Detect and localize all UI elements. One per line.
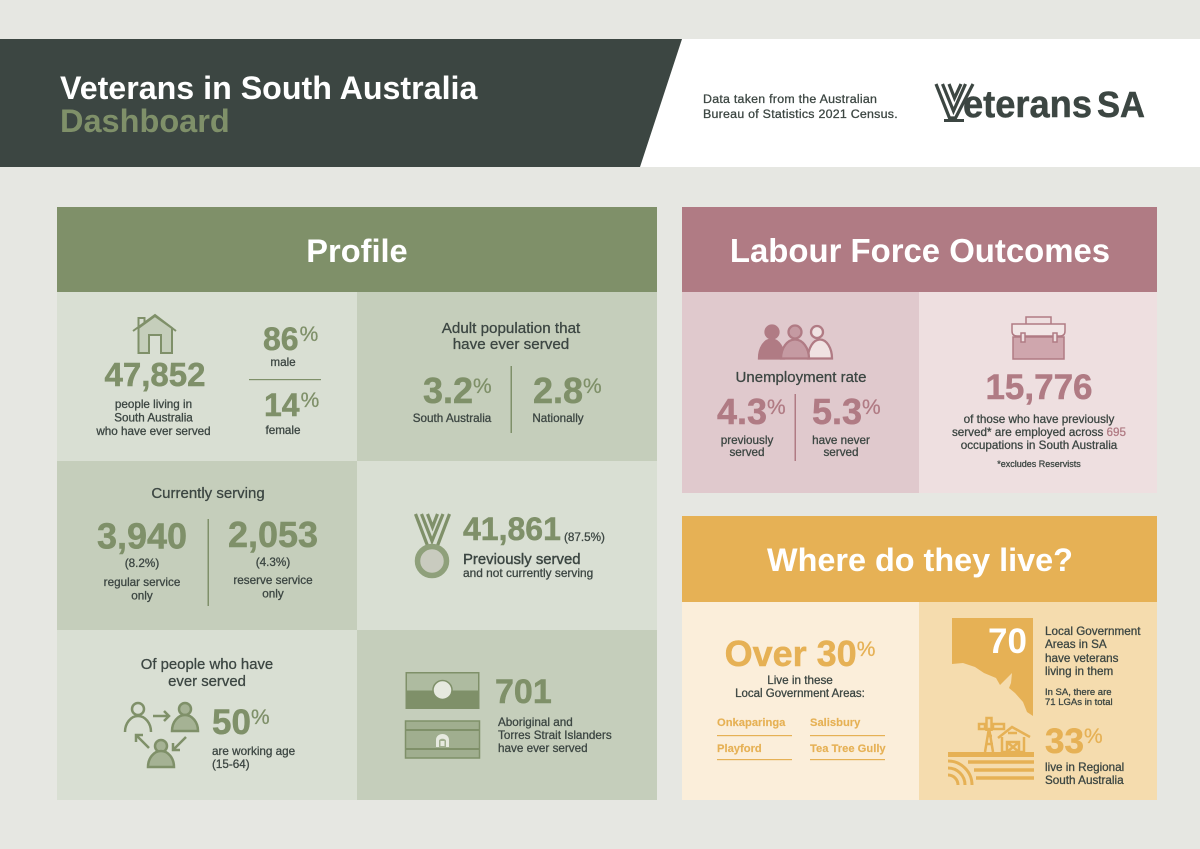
cell: currently serving: (4.3%) xyxy=(256,556,290,569)
cell: Aboriginal and Torres Strait Islanders: Torres Strait Islanders xyxy=(498,729,612,742)
icon: house xyxy=(133,315,176,353)
cell: currently serving: Currently serving xyxy=(151,485,265,502)
cell: employed across occupations: of those who have previously xyxy=(964,413,1115,426)
cell: unemployment rate: 4.3 xyxy=(717,391,767,432)
cell: people who have ever served: % xyxy=(300,323,318,346)
cell: currently serving: regular service xyxy=(104,576,180,589)
panel: Labour Force Outcomes xyxy=(682,207,1157,493)
cell: people who have ever served: female xyxy=(265,424,301,437)
data source note: Bureau of Statistics 2021 Census. xyxy=(703,107,898,121)
cell: working age: Of people who have xyxy=(141,657,273,673)
cell: previously served: and not currently serving xyxy=(463,566,593,580)
cell: LGAs and regional: Areas in SA xyxy=(1045,638,1107,651)
cell: employed across occupations: *excludes Reservists xyxy=(997,459,1081,469)
title: Veterans in South Australia xyxy=(60,70,478,106)
cell: LGAs and regional xyxy=(919,602,1157,800)
cell: LGAs and regional: Local Government xyxy=(1045,625,1141,638)
cell: currently serving: reserve service xyxy=(233,574,313,587)
cell: previously served: (87.5%) xyxy=(564,531,605,544)
cell: LGAs and regional: have veterans xyxy=(1045,652,1119,665)
logo: Veterans SA xyxy=(936,84,1145,126)
data source note: Data taken from the Australian xyxy=(703,92,877,106)
cell: unemployment rate: served xyxy=(729,446,765,459)
cell: adult population: 2.8 xyxy=(533,370,583,411)
cell: people who have ever served: 47,852 xyxy=(105,356,205,393)
cell: over 30 percent: Live in these xyxy=(767,674,833,687)
cell: currently serving: only xyxy=(262,588,284,600)
cell: over 30 percent: Over 30 xyxy=(725,633,857,674)
cell: working age: ever served xyxy=(168,674,246,690)
cell: currently serving: only xyxy=(131,590,153,602)
icon: Torres Strait Islander flag xyxy=(405,721,480,758)
cell: currently serving: 2,053 xyxy=(228,514,318,555)
cell: unemployment rate: % xyxy=(862,396,881,419)
cell: employed across occupations xyxy=(919,292,1157,493)
heading: Labour Force Outcomes xyxy=(682,207,1157,292)
data source note xyxy=(703,92,898,121)
cell: adult population: have ever served xyxy=(453,336,569,353)
cell: LGAs and regional: In SA, there are xyxy=(1045,687,1112,698)
map: South Australia xyxy=(952,618,1033,716)
cell: adult population: % xyxy=(583,375,602,398)
cell: previously served xyxy=(357,461,657,630)
cell: employed across occupations: occupations in South Australia xyxy=(961,439,1118,452)
cell: currently serving: 3,940 xyxy=(97,516,187,556)
cell: over 30 percent: Local Government Areas: xyxy=(735,688,865,700)
cell: unemployment rate xyxy=(682,292,919,493)
cell: LGAs and regional: living in them xyxy=(1045,665,1113,678)
cell: employed across occupations: 15,776 xyxy=(985,368,1093,407)
map: South Australia: 70 xyxy=(988,622,1027,661)
cell: people who have ever served: 14 xyxy=(264,387,300,423)
cell: adult population: 3.2 xyxy=(423,370,473,411)
cell: over 30 percent: % xyxy=(857,638,875,661)
cell: adult population: % xyxy=(473,375,492,398)
cell: people who have ever served: 86 xyxy=(263,321,299,357)
cell: people who have ever served xyxy=(57,292,357,461)
icon: medal xyxy=(416,514,450,576)
heading: Profile: Profile xyxy=(306,232,408,269)
icon: farm with windmill and barn xyxy=(948,718,1034,785)
heading: Labour Force Outcomes: Labour Force Outcomes xyxy=(730,232,1110,269)
cell: over 30 percent: Playford xyxy=(717,743,762,755)
cell: people who have ever served: people living in xyxy=(115,398,192,411)
cell: LGAs and regional: 33 xyxy=(1045,722,1084,761)
cell: Aboriginal and Torres Strait Islanders: 701 xyxy=(495,673,552,711)
icon: people cycle xyxy=(125,703,198,767)
cell: adult population: Adult population that xyxy=(442,320,581,337)
cell: working age: 50 xyxy=(212,703,251,742)
cell: previously served: 41,861 xyxy=(463,511,561,547)
heading: Profile xyxy=(57,207,657,292)
cell: unemployment rate: Unemployment rate xyxy=(736,369,866,386)
cell: people who have ever served: % xyxy=(301,389,319,412)
cell: Aboriginal and Torres Strait Islanders xyxy=(357,630,657,800)
cell: unemployment rate: have never xyxy=(812,434,870,447)
cell: LGAs and regional: live in Regional xyxy=(1045,761,1124,774)
cell: people who have ever served: South Australia xyxy=(114,412,193,424)
cell: working age: (15-64) xyxy=(212,758,250,771)
cell: people who have ever served: male xyxy=(270,356,296,369)
cell: currently serving: (8.2%) xyxy=(125,557,159,570)
heading: Where do they live? xyxy=(682,516,1157,602)
panel: Profile xyxy=(57,207,657,800)
cell: LGAs and regional: 71 LGAs in total xyxy=(1045,697,1113,708)
cell: LGAs and regional: South Australia xyxy=(1045,774,1124,787)
cell: over 30 percent xyxy=(682,602,919,800)
cell: working age xyxy=(57,630,357,800)
cell: unemployment rate: previously xyxy=(721,434,773,447)
cell: Aboriginal and Torres Strait Islanders: have ever served xyxy=(498,742,588,755)
cell: over 30 percent: Salisbury xyxy=(810,717,861,729)
cell: unemployment rate: % xyxy=(767,396,786,419)
cell: unemployment rate: served xyxy=(823,446,859,459)
panel: Where do they live? xyxy=(682,516,1157,800)
heading: Where do they live?: Where do they live? xyxy=(767,542,1073,578)
icon: Aboriginal flag xyxy=(406,672,480,709)
cell: employed across occupations: served* are employed across 695 xyxy=(952,426,1127,439)
header banner xyxy=(0,39,1200,167)
title xyxy=(60,70,478,139)
cell: people who have ever served: who have ever served xyxy=(95,425,211,438)
cell: LGAs and regional: % xyxy=(1084,725,1103,748)
logo: Veterans SA: eterans xyxy=(963,84,1092,126)
cell: over 30 percent: Tea Tree Gully xyxy=(810,743,886,755)
cell: over 30 percent: Onkaparinga xyxy=(717,717,786,729)
icon: briefcase xyxy=(1012,317,1065,359)
cell: currently serving xyxy=(57,461,357,630)
cell: adult population xyxy=(357,292,657,461)
cell: working age: % xyxy=(251,706,270,729)
cell: Aboriginal and Torres Strait Islanders: Aboriginal and xyxy=(498,716,573,729)
cell: previously served: Previously served xyxy=(463,552,581,568)
cell: working age: are working age xyxy=(212,745,295,758)
cell: adult population: South Australia xyxy=(413,412,492,425)
cell: adult population: Nationally xyxy=(532,412,584,425)
logo: Veterans SA: SA xyxy=(1097,84,1145,125)
title: Dashboard xyxy=(60,103,230,139)
cell: unemployment rate: 5.3 xyxy=(812,391,862,432)
icon: three people xyxy=(759,326,832,358)
